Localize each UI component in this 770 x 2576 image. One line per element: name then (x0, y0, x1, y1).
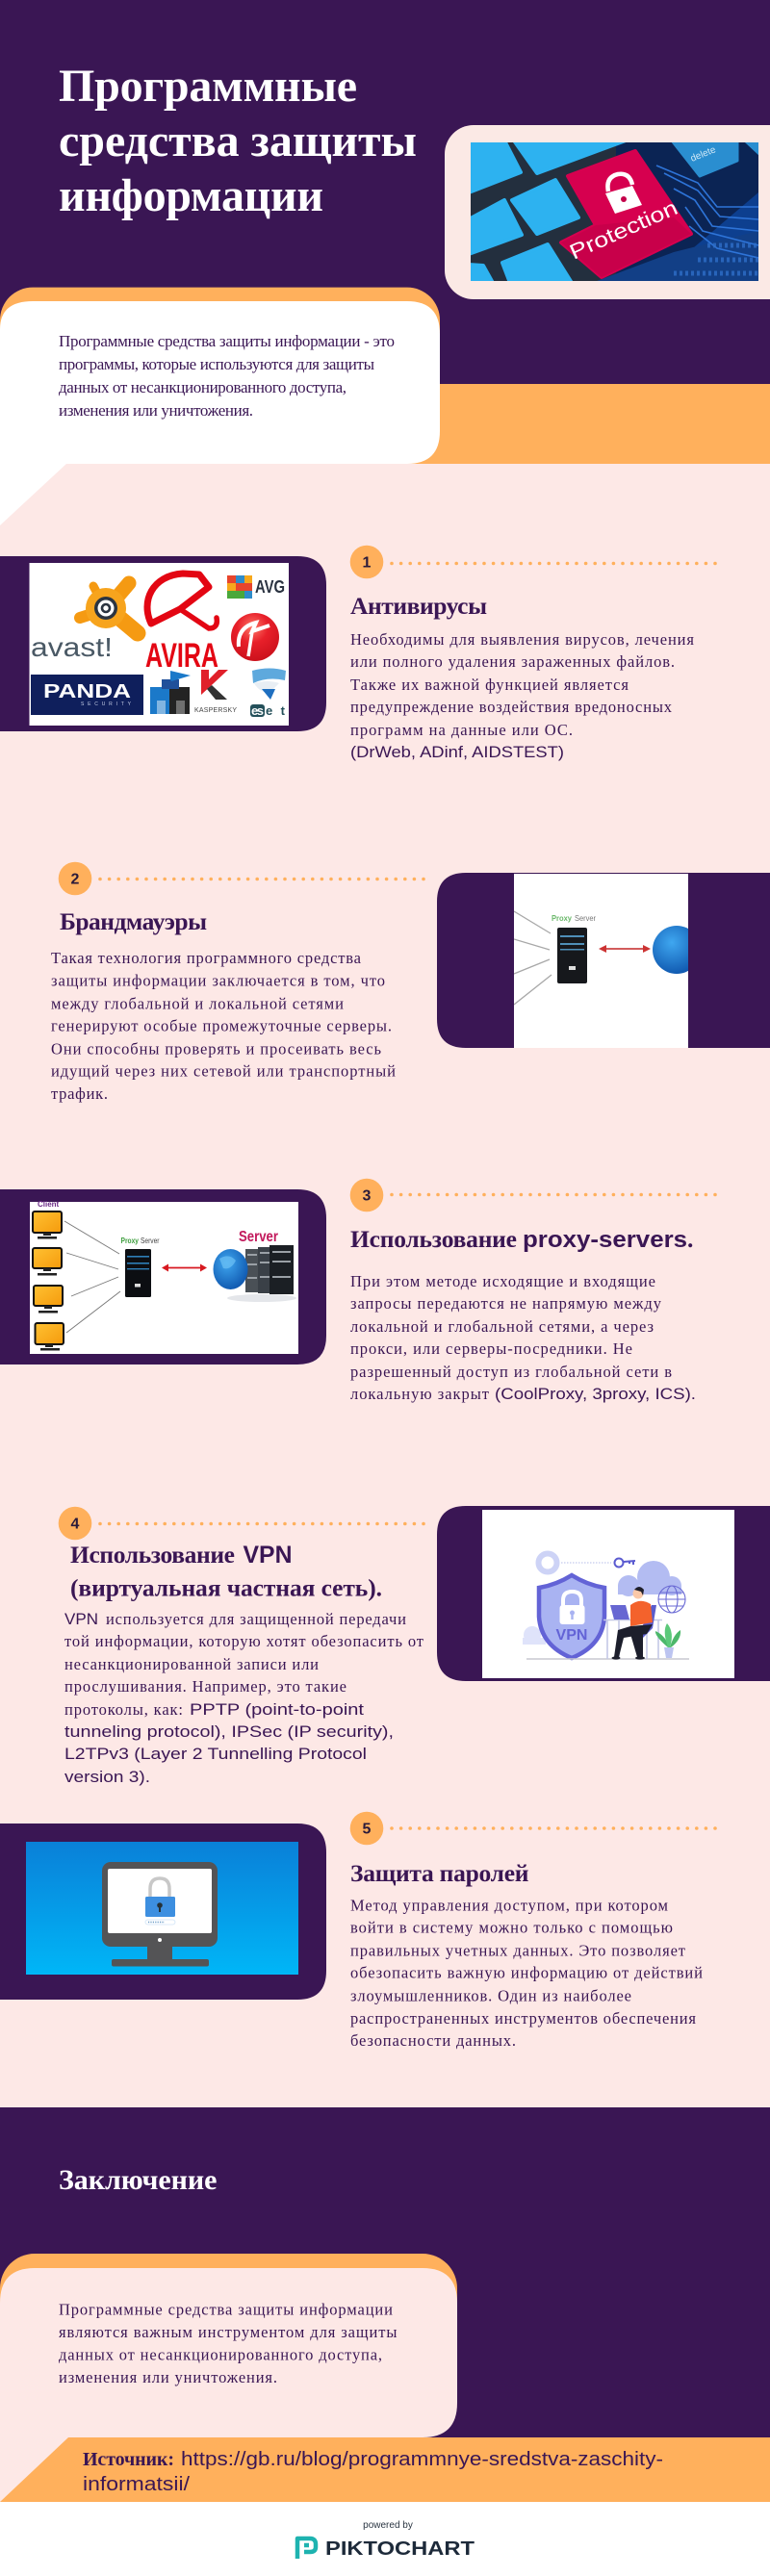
text: firewalls: идущий через них сетевой или транспортный (51, 1062, 396, 1080)
logo: panda security: SECURITY (81, 701, 132, 707)
header image: protection keyboard: delete (689, 144, 718, 165)
logo: avast: avast! (31, 632, 113, 662)
text: conclusion: изменения или уничтожения. (59, 2368, 277, 2386)
heading: vpn: Использование (70, 1541, 235, 1569)
small cloud (523, 1626, 546, 1645)
step marker 3: 3 (363, 1187, 372, 1205)
heading: conclusion: Заключение (59, 2164, 218, 2196)
shield: VPN (556, 1627, 587, 1644)
logo: kaspersky (194, 670, 237, 714)
step marker 3 (350, 1179, 716, 1211)
title: Программные (59, 61, 357, 112)
text: passwords (350, 1896, 703, 2050)
text: antivirus (350, 630, 694, 761)
panel: source band (0, 2437, 770, 2502)
footer: powered by piktochart (0, 2502, 770, 2576)
arrow: double red (162, 1264, 207, 1272)
client monitors (33, 1200, 64, 1351)
heading: passwords: Защита паролей (350, 1859, 529, 1887)
panel: password image (0, 1824, 326, 2000)
footer: powered by piktochart: powered by (363, 2520, 413, 2531)
logo: kaspersky: KASPERSKY (194, 707, 237, 714)
heading: firewalls: Брандмауэры (60, 907, 207, 935)
client monitors: Client (38, 1200, 60, 1209)
text: passwords: войти в систему можно только с помощью (350, 1919, 673, 1936)
text: firewalls: Они способны проверять и просеивать весь (51, 1039, 381, 1058)
lock on red key (605, 174, 642, 214)
intro text: программы, которые используются для защиты (59, 355, 375, 373)
text: passwords: обезопасить важную информацию от действий (350, 1963, 703, 1982)
proxy server (121, 1237, 160, 1297)
text: firewalls: Такая технология программного средства (51, 949, 362, 967)
text: passwords: правильных учетных данных. Это позволяет (350, 1942, 685, 1959)
logo: panda security (31, 675, 143, 715)
text: proxy: При этом методе исходящие и входящие (350, 1272, 655, 1290)
text: conclusion: являются важным инструментом для защиты (59, 2323, 397, 2341)
logo: eset: et (266, 703, 286, 718)
monitor with lock (102, 1862, 218, 1967)
step marker 1 (350, 546, 716, 578)
header image: protection keyboard (445, 125, 770, 299)
text: vpn: version 3). (64, 1769, 150, 1786)
text: firewalls: трафик. (51, 1084, 108, 1103)
text: vpn (64, 1610, 424, 1786)
panel: antivirus image (0, 556, 326, 731)
heading: proxy (350, 1225, 693, 1253)
panel: intro callout (0, 288, 440, 525)
text: vpn: протоколы, как: (64, 1700, 183, 1719)
heading: vpn (70, 1541, 382, 1601)
source text: Источник: (83, 2449, 174, 2470)
step marker 5 (350, 1812, 716, 1845)
text: antivirus: программ на данные или ОС. (350, 721, 573, 739)
logo: avg (227, 575, 285, 599)
logo: eset: es (251, 703, 264, 718)
heading: proxy: proxy-servers (523, 1227, 687, 1253)
footer: powered by piktochart: PIKTOCHART (325, 2538, 475, 2560)
gear and key (539, 1553, 635, 1572)
intro text (59, 332, 395, 420)
text: antivirus: Необходимы для выявления вирусов, лечения (350, 630, 694, 649)
panel: proxy image (0, 1189, 326, 1365)
shield (539, 1575, 604, 1658)
title (59, 61, 417, 221)
text: vpn: той информации, которую хотят обезопасить от (64, 1632, 424, 1650)
icon: piktochart logo (297, 2538, 316, 2559)
text: conclusion: Программные средства защиты информации (59, 2300, 393, 2319)
text: passwords: распространенных инструментов обеспечения (350, 2009, 696, 2028)
source text: informatsii/ (83, 2474, 190, 2495)
step marker 1: 1 (363, 554, 372, 572)
text: passwords: Метод управления доступом, при котором (350, 1896, 669, 1915)
heading: antivirus: Антивирусы (350, 592, 487, 620)
desk and ground (526, 1620, 689, 1659)
logo: trend micro (231, 613, 279, 661)
logo: avira: AVIRA (145, 637, 218, 675)
step marker 5: 5 (363, 1821, 372, 1838)
logo: avira (145, 574, 218, 675)
text: firewalls: между глобальной и локальной сетями (51, 995, 344, 1012)
text: firewalls: защиты информации заключается в том, что (51, 972, 385, 989)
intro text: данных от несанкционированного доступа, (59, 378, 346, 396)
step marker 2 (59, 862, 424, 895)
text: vpn: прослушивания. Например, это такие (64, 1677, 346, 1696)
proxy server: Server (141, 1237, 160, 1245)
person at laptop (610, 1587, 656, 1660)
source text (83, 2449, 663, 2495)
logo: eset (250, 668, 286, 718)
text: proxy: разрешенный доступ из глобальной сети в (350, 1363, 672, 1381)
globe (658, 1586, 685, 1613)
text: antivirus: (DrWeb, ADinf, AIDSTEST) (350, 744, 564, 761)
heading: proxy: Использование (350, 1225, 517, 1253)
heading: proxy: . (687, 1225, 693, 1253)
logo: castle (150, 671, 191, 714)
text: proxy (350, 1272, 696, 1403)
server: Server (239, 1229, 278, 1245)
text: antivirus: Также их важной функцией является (350, 676, 629, 694)
cloud (618, 1561, 681, 1596)
panel: firewall image: Proxy (552, 913, 572, 923)
text: proxy: запросы передаются не напрямую между (350, 1294, 662, 1313)
text: antivirus: предупреждение воздействия вредоносных (350, 698, 673, 716)
text: passwords: злоумышленников. Один из наиболее (350, 1986, 631, 2005)
heading: vpn: (виртуальная частная сеть). (70, 1574, 382, 1601)
text: firewalls: генерируют особые промежуточные серверы. (51, 1016, 392, 1035)
text: proxy: локальной и глобальной сетями, а через (350, 1317, 654, 1336)
text: vpn: VPN (64, 1611, 98, 1628)
text: vpn: несанкционированной записи или (64, 1655, 319, 1673)
panel: conclusion (0, 2107, 770, 2437)
proxy server: Proxy (121, 1237, 139, 1245)
plant (655, 1623, 680, 1658)
intro text: Программные средства защиты информации - это (59, 332, 395, 350)
panel: firewall image: Server (575, 913, 596, 923)
logo: avg: AVG (255, 577, 285, 597)
text: proxy: локальную закрыт (350, 1385, 489, 1403)
text: vpn: L2TPv3 (Layer 2 Tunnelling Protocol (64, 1746, 367, 1763)
panel: vpn image (437, 1506, 770, 1681)
logo: avast (31, 583, 138, 662)
text: conclusion (59, 2300, 397, 2386)
header image: protection keyboard: Protection (566, 195, 681, 265)
server (214, 1229, 296, 1302)
title: информации (59, 170, 323, 221)
text: antivirus: или полного удаления зараженных файлов. (350, 652, 675, 671)
source text: https://gb.ru/blog/programmnye-sredstva-zaschity- (181, 2449, 663, 2470)
step marker 4: 4 (71, 1517, 80, 1532)
panel: firewall image (437, 873, 770, 1048)
step marker 2: 2 (71, 872, 80, 887)
text: passwords: безопасности данных. (350, 2031, 516, 2050)
text: firewalls (51, 949, 396, 1103)
text: proxy: (CoolProxy, 3proxy, ICS). (495, 1386, 696, 1403)
step marker 4 (59, 1507, 424, 1540)
intro text: изменения или уничтожения. (59, 401, 253, 420)
panel: header (0, 0, 770, 464)
text: vpn: используется для защищенной передачи (106, 1610, 406, 1628)
logo: panda security: PANDA (43, 681, 131, 702)
heading: vpn: VPN (243, 1542, 293, 1569)
text: proxy: прокси, или серверы-посредники. Не (350, 1339, 632, 1358)
text: vpn: PPTP (point-to-point (190, 1701, 365, 1719)
text: conclusion: данных от несанкционированного доступа, (59, 2346, 382, 2363)
text: vpn: tunneling protocol), IPSec (IP security), (64, 1723, 394, 1741)
title: средства защиты (59, 115, 417, 166)
